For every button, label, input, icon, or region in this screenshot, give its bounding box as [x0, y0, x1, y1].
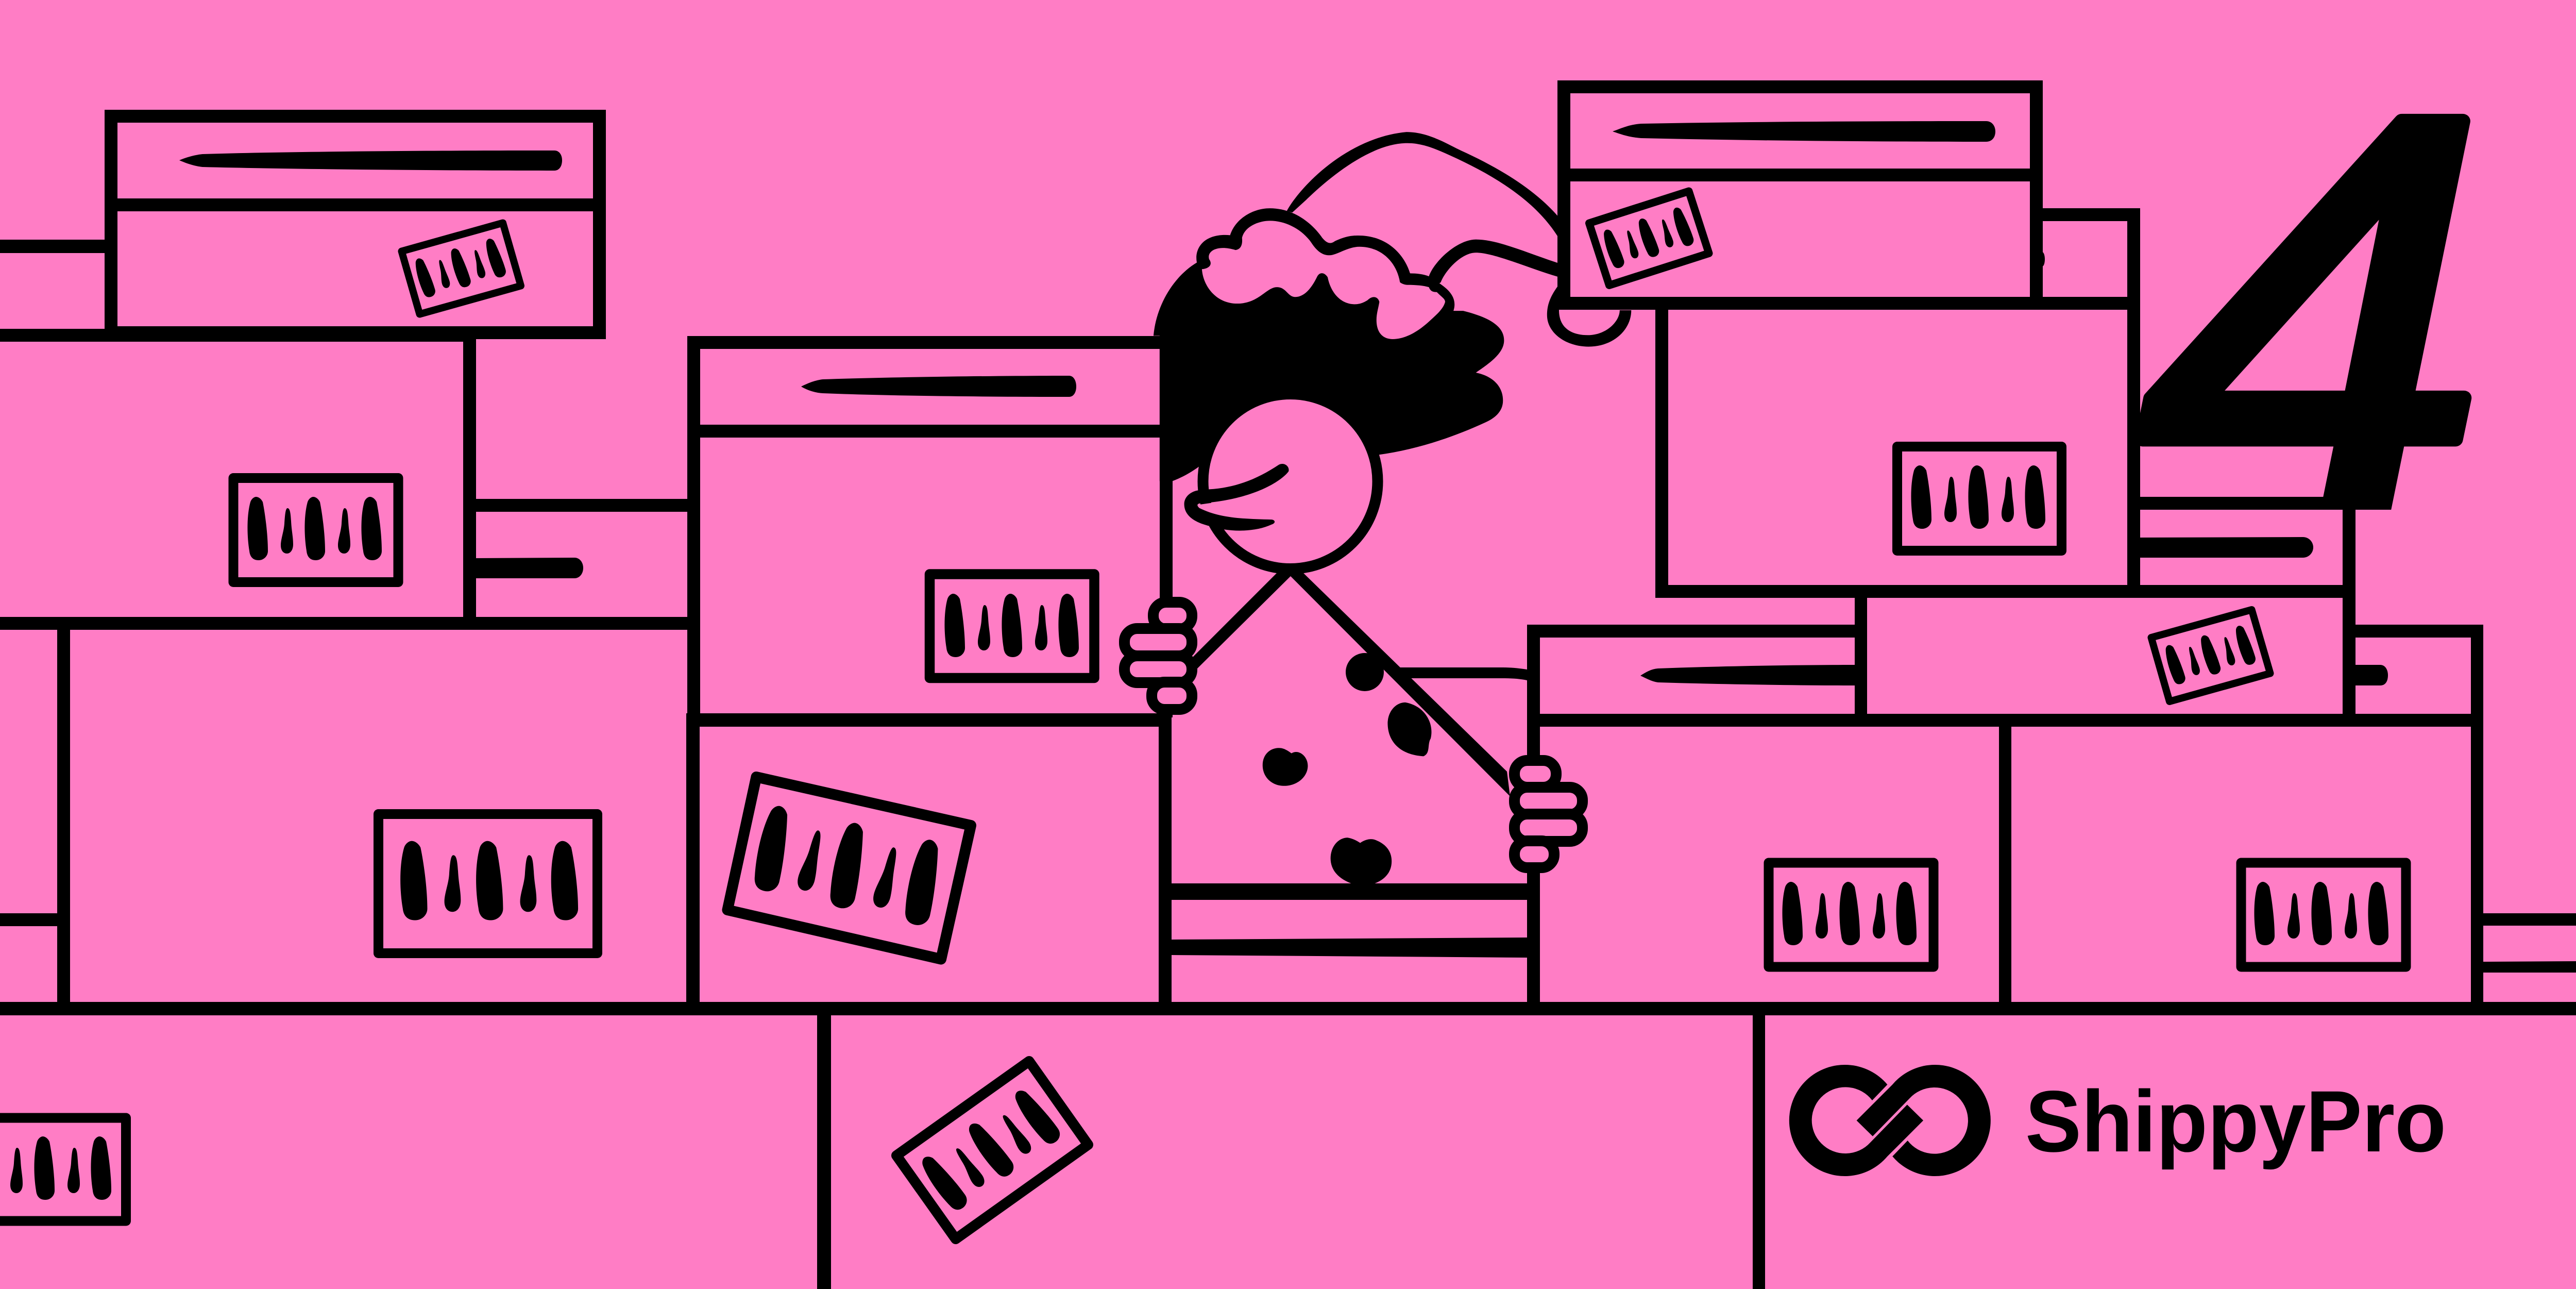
box tape strokes: [179, 121, 2388, 685]
character: hand on face: [1184, 464, 1289, 531]
wordmark: ShippyPro: [2025, 1073, 2446, 1170]
label: top-left tilted barcode: [402, 223, 521, 314]
panel: centre-left box outlines: [686, 336, 1173, 1015]
character: head, hair and hat: [1154, 132, 1631, 481]
logo: ShippyPro: [1789, 1065, 2446, 1176]
character: body with dress and arms: [1172, 567, 1527, 958]
label: middle-right tilted barcode: [2151, 610, 2270, 701]
label: lower-right box barcode A: [1769, 863, 1934, 967]
hat brim: [1202, 221, 1445, 339]
label: large left barcode: [378, 814, 598, 953]
label: bottom-left cropped barcode: [0, 1118, 126, 1221]
label: centre box barcode: [929, 574, 1094, 678]
label: bottom diamond barcode: [896, 1061, 1088, 1239]
label: upper-right box barcode: [1897, 446, 2062, 550]
hat tail: [1287, 132, 1557, 236]
character: head circle: [1203, 394, 1378, 569]
label: top-right tilted barcode: [1589, 191, 1709, 286]
number 4: 4: [2139, 0, 2487, 660]
label: lower-right box barcode B: [2241, 863, 2406, 967]
character: right hand fingers: [1515, 761, 1583, 868]
hair: [1154, 208, 1504, 481]
hat strap: [1429, 240, 1557, 287]
label: left box barcode: [233, 478, 398, 582]
panel: left box stack outlines: [0, 110, 690, 1003]
icon: infinity link mark: [1789, 1065, 1991, 1176]
panel: floor boxes outlines: [0, 1002, 2576, 1289]
thumb hook: [1547, 287, 1631, 347]
character: left hand fingers: [1124, 602, 1192, 709]
label: large tilted barcode: [727, 777, 971, 959]
panel: right box stack outlines: [1527, 80, 2576, 1015]
